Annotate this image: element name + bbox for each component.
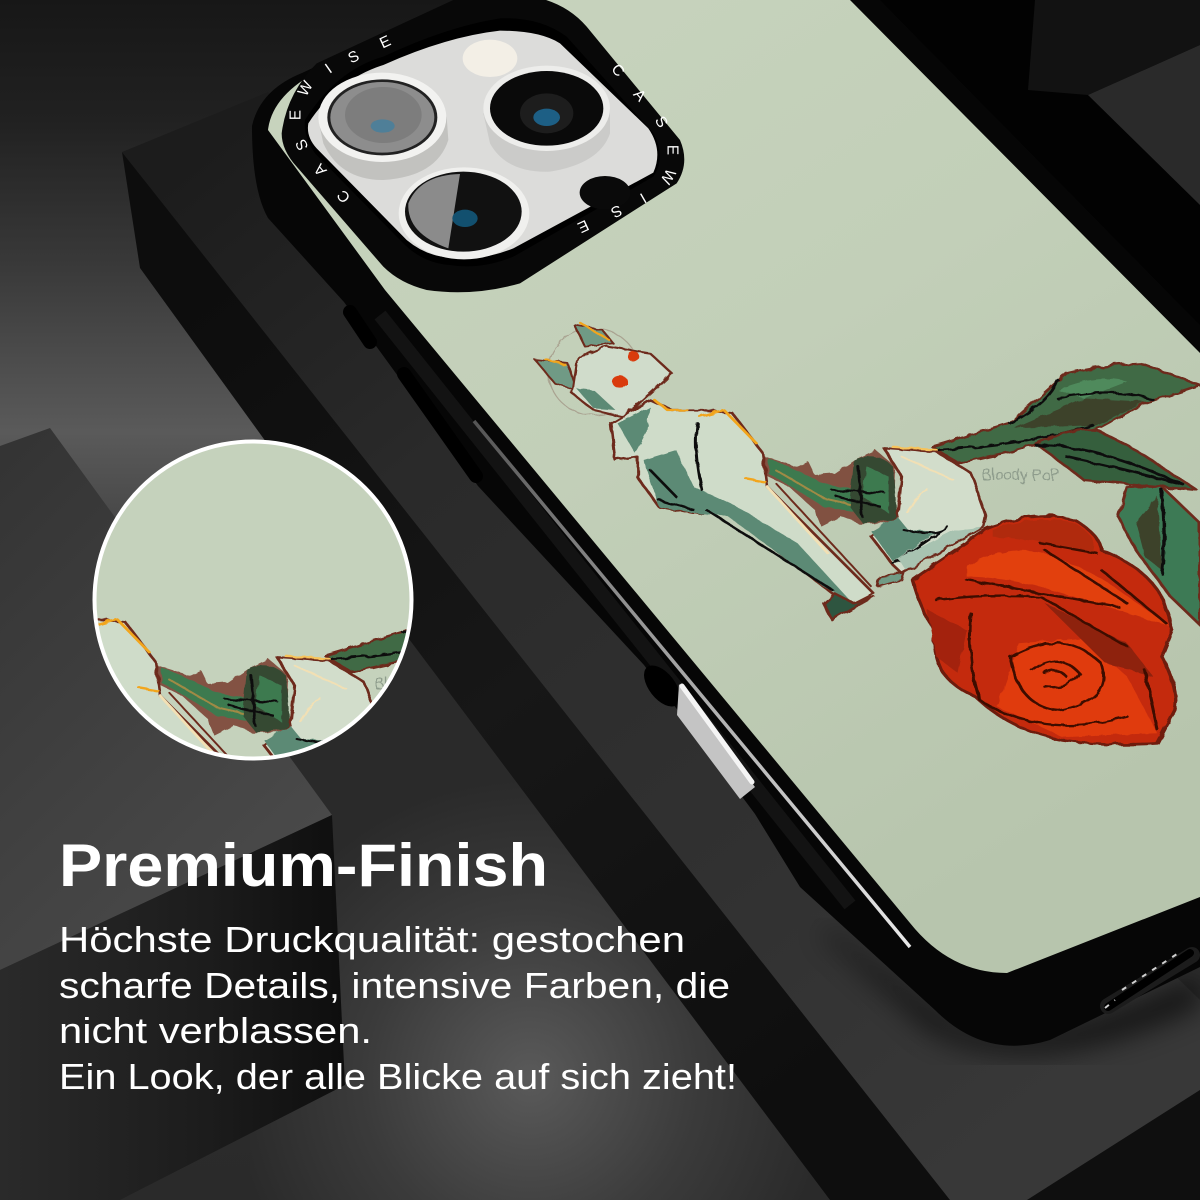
lens 1 [318, 73, 448, 180]
CASEWISE lettering: S [293, 136, 312, 153]
silver rim [474, 421, 910, 947]
body text [59, 919, 737, 1097]
artwork: cat on rose [535, 323, 1200, 744]
heading: Premium-Finish [59, 832, 548, 899]
CASEWISE lettering: E [575, 216, 591, 236]
lidar sensor [580, 176, 630, 209]
lens 3 [399, 167, 529, 259]
magnifier circle [92, 440, 414, 760]
lens 2 [483, 66, 610, 172]
action button recess [637, 659, 687, 713]
CASEWISE lettering: I [322, 61, 335, 77]
body text: nicht verblassen. [59, 1010, 372, 1051]
low block top face [0, 428, 332, 970]
platform side face [122, 152, 960, 1200]
top right block [1028, 0, 1200, 205]
phone case [252, 0, 1200, 1046]
back panel [268, 0, 1200, 973]
body text: Höchste Druckqualität: gestochen [59, 919, 685, 960]
low block front face [0, 815, 345, 1200]
bottom right dark block [1027, 1090, 1200, 1200]
CASEWISE lettering: E [287, 110, 304, 120]
CASEWISE lettering: E [377, 33, 394, 52]
camera plateau [308, 31, 657, 258]
flash [463, 40, 517, 77]
CASEWISE lettering: W [295, 78, 317, 99]
shadow right of phone [850, 0, 1200, 360]
CASEWISE lettering: I [637, 189, 649, 206]
silver action button [677, 684, 755, 799]
volume button [350, 312, 370, 342]
inner ring [305, 18, 660, 266]
camera bezel [282, 0, 684, 292]
charging port [1105, 952, 1192, 1008]
CASEWISE lettering: E [663, 145, 680, 155]
body text: Ein Look, der alle Blicke auf sich zieht! [59, 1056, 737, 1097]
phone shadow [820, 930, 1200, 1052]
camera bump [282, 0, 684, 292]
CASEWISE lettering: S [608, 201, 625, 221]
CASEWISE lettering: A [630, 86, 650, 106]
side button [404, 374, 476, 476]
CASEWISE lettering [287, 33, 680, 236]
case body [252, 0, 1200, 1046]
CASEWISE lettering: C [608, 61, 628, 80]
CASEWISE lettering: S [345, 48, 362, 67]
body text: scharfe Details, intensive Farben, die [59, 965, 730, 1006]
case edge highlight [380, 315, 850, 905]
CASEWISE lettering: S [651, 113, 671, 131]
floor light [250, 560, 900, 1200]
CASEWISE lettering: W [656, 166, 679, 187]
CASEWISE lettering: A [310, 159, 330, 179]
CASEWISE lettering: C [334, 186, 354, 206]
